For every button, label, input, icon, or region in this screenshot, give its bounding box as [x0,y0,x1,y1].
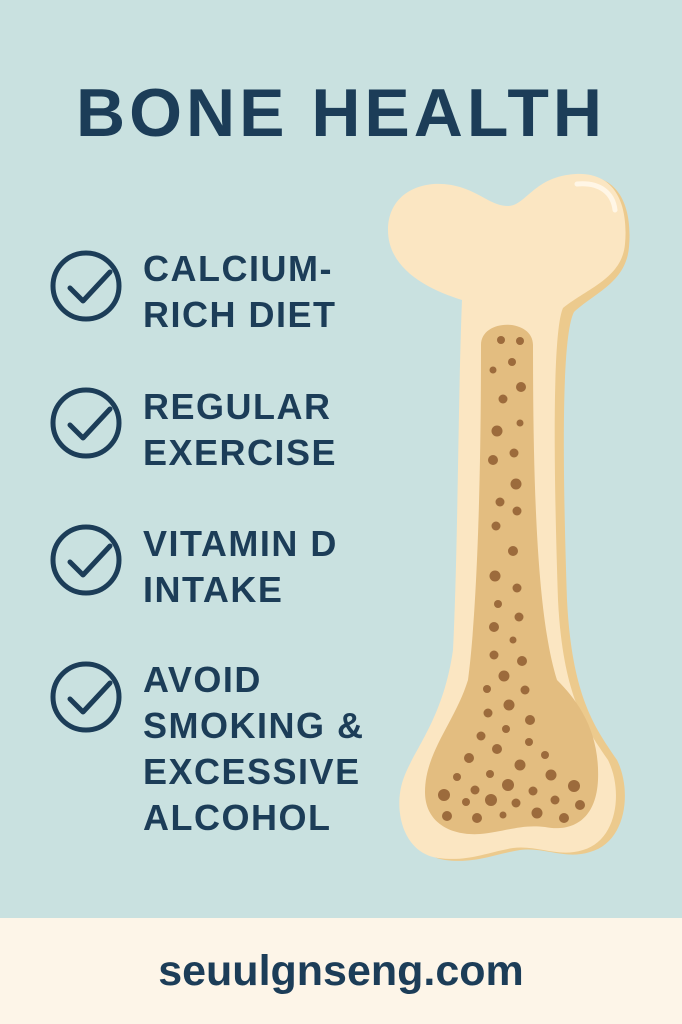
item: vitamin D intake [143,523,338,610]
item: avoid smoking [143,659,365,838]
item: regular exercise: EXERCISE [143,432,337,473]
icon: check 2 [53,390,119,456]
item: calcium-rich diet: CALCIUM- [143,248,333,289]
icon: check 4 [53,664,119,730]
bone illustration [388,174,630,861]
item: vitamin D intake: INTAKE [143,569,283,610]
bone marrow [425,325,598,834]
footer url: seuulgnseng.com [158,947,524,995]
item: avoid smoking: EXCESSIVE [143,751,361,792]
item: calcium-rich diet: RICH DIET [143,294,336,335]
item: avoid smoking: SMOKING & [143,705,365,746]
item: avoid smoking: ALCOHOL [143,797,331,838]
item: regular exercise: REGULAR [143,386,332,427]
item: vitamin D intake: VITAMIN D [143,523,338,564]
title: BONE HEALTH [76,75,606,151]
item: calcium-rich diet [143,248,336,335]
icon: check 3 [53,527,119,593]
icon: check 1 [53,253,119,319]
item: avoid smoking: AVOID [143,659,262,700]
item: regular exercise [143,386,337,473]
footer [0,918,682,1024]
